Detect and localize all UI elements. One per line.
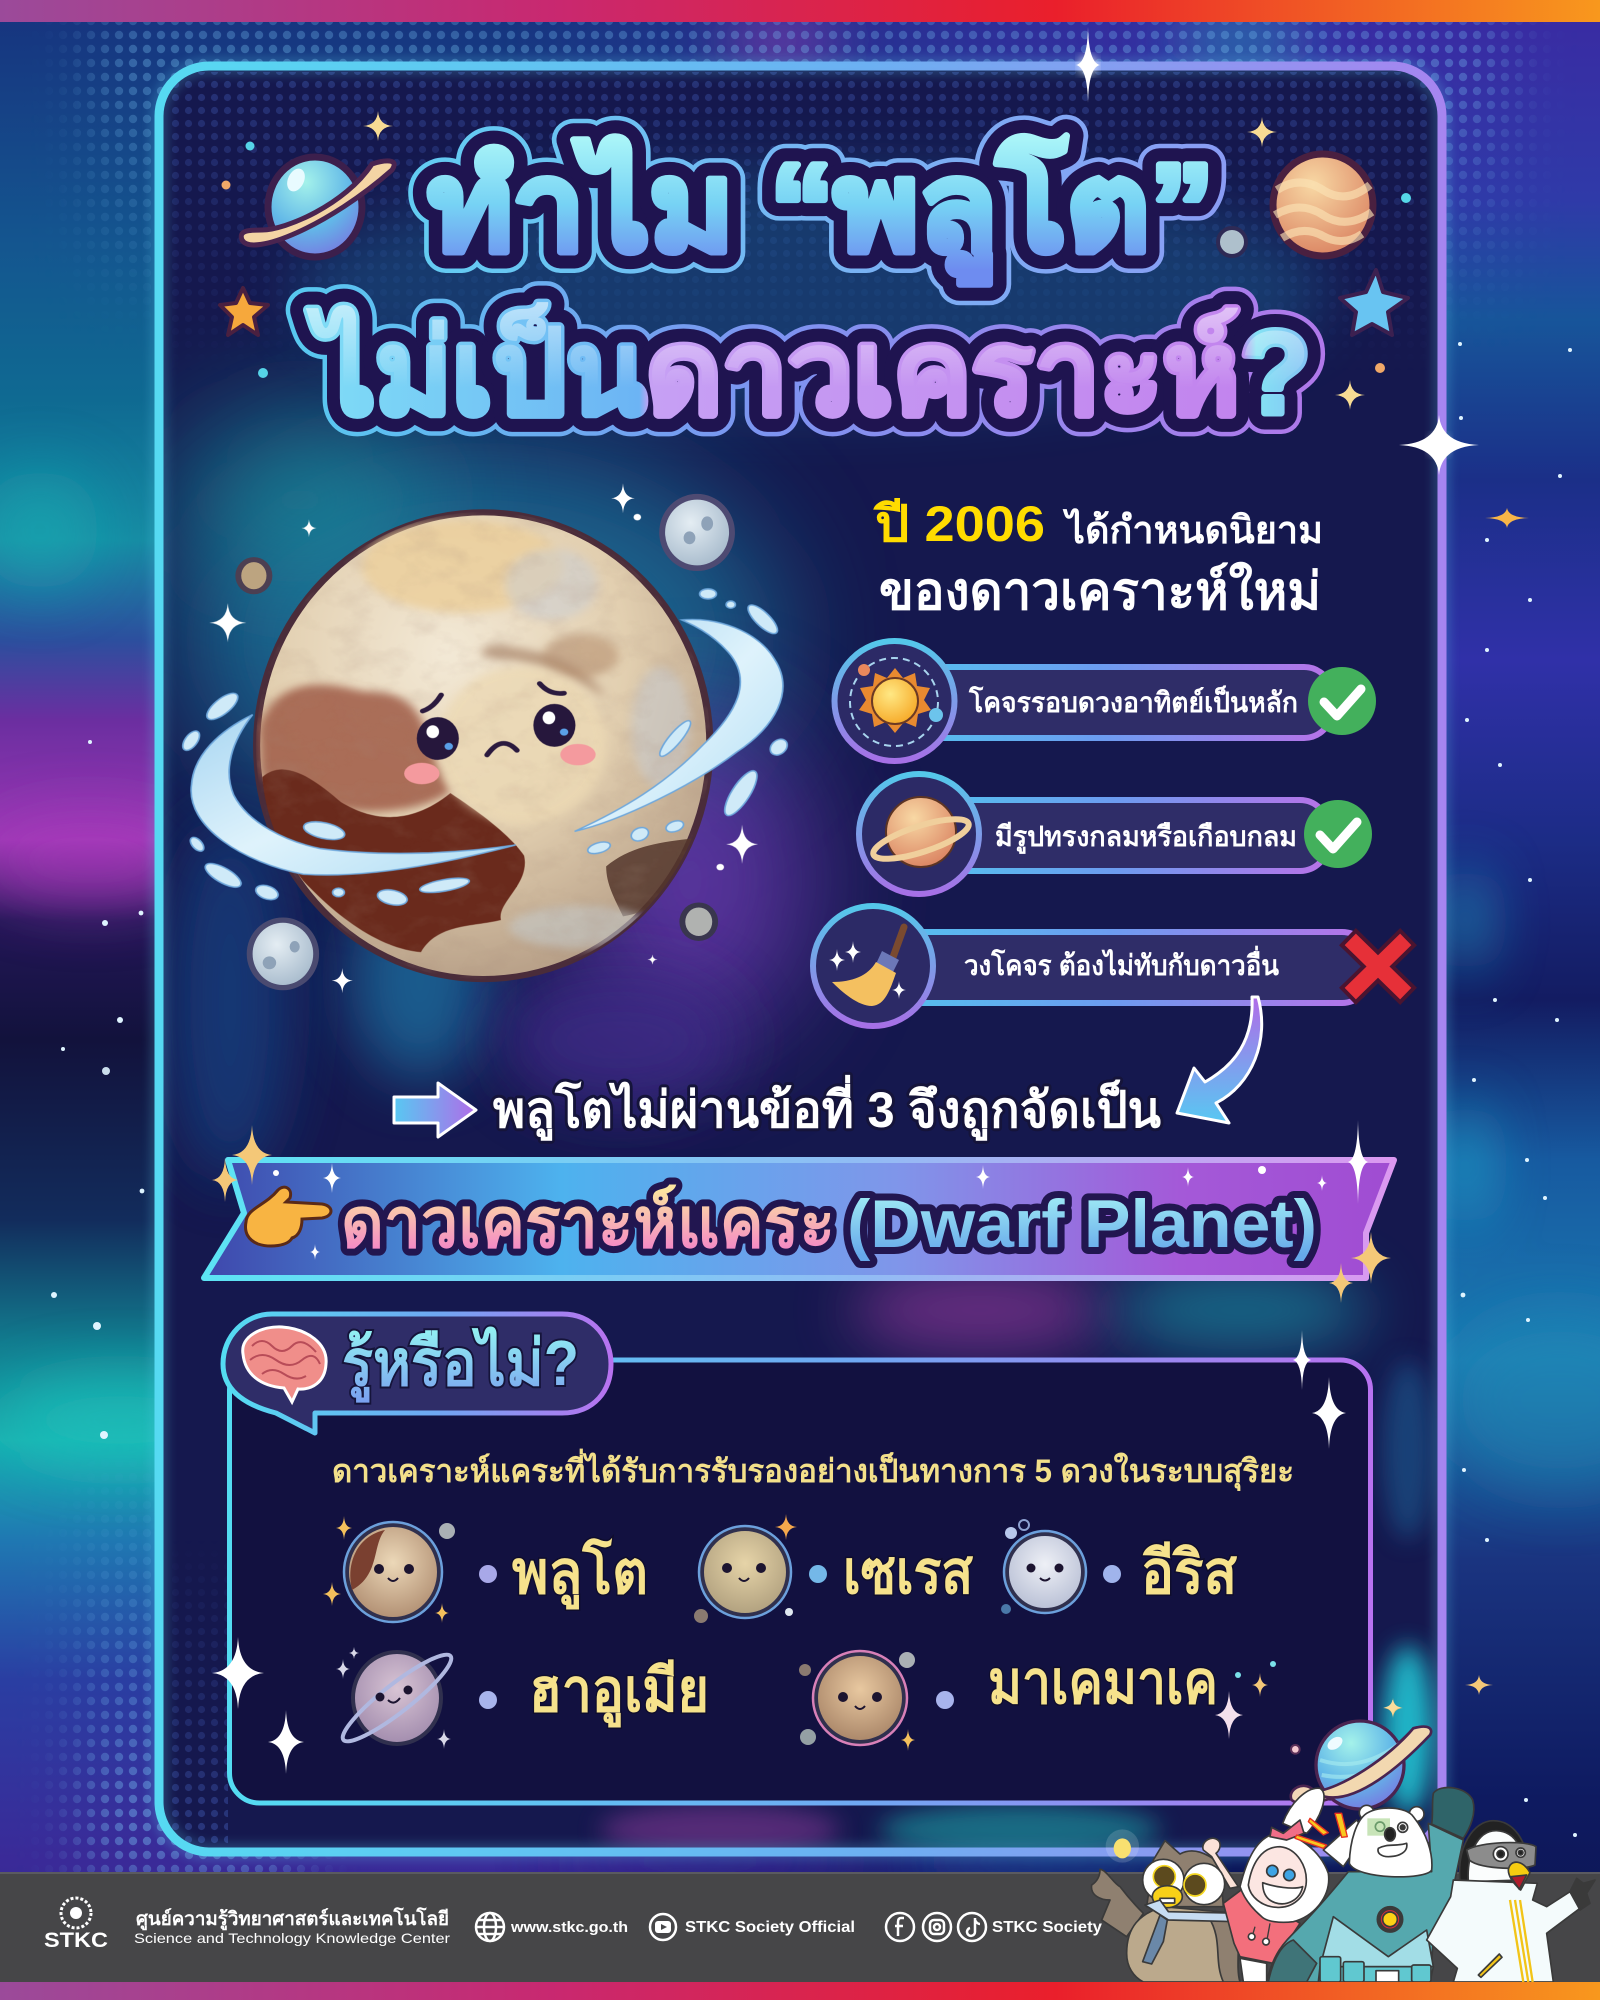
footer band: STKC Society [992,1919,1102,1936]
item: Haumea: ฮาอูเมีย [529,1657,709,1728]
item: Pluto [323,1516,648,1623]
item: Eris: อีริส [1141,1539,1237,1606]
icy ring [179,589,791,908]
text: dwarf planet: ดาวเคราะห์แคระ [341,1184,835,1262]
footer band: Science and Technology Knowledge Center [134,1930,450,1946]
heading: 2006 new planet definition: ได้กำหนดนิยาม [1062,508,1323,552]
title: why Pluto is not a planet [290,136,1330,439]
item: Pluto: พลูโต [512,1537,648,1610]
sparkles on the frame [1076,27,1529,528]
background stars [51,342,1577,1837]
logo: STKC [44,1898,108,1952]
panel sparkles [212,1330,1493,1774]
item: Makemake: มาเคมาเค [988,1649,1218,1716]
title: why Pluto is not a planet: ไม่เป็นดาวเคราะห์? [305,301,1311,439]
speech bubble heading [223,1314,611,1433]
icons: social [886,1913,986,1941]
criterion 2: round shape: มีรูปทรงกลมหรือเกือบกลม [995,821,1297,854]
icon: broom [813,906,933,1026]
sparkles [209,483,758,993]
face [404,684,596,784]
text: dwarf planet: ดาวเคราะห์แคระ [341,1184,835,1262]
title: why Pluto is not a planet: ไม่เป็นดาวเคราะห์? [305,301,1311,439]
mascot: penguin [1427,1821,1595,1982]
icon: sun orbit [834,641,954,761]
bottom gradient bar [0,1982,1600,2000]
heading: 2006 new planet definition: ปี 2006 [873,496,1045,552]
text: five official dwarf planets: ดาวเคราะห์แคระที่ได้รับการรับรองอย่างเป็นทางการ 5 ดวงในระบบสุริยะ [332,1448,1294,1492]
text: dwarf planet: (Dwarf Planet) [847,1186,1317,1262]
mascot: owl [1091,1838,1242,1982]
item: Haumea [335,1645,709,1751]
icon: pointing hand [246,1187,331,1246]
mascot: rabbit-hood girl [1223,1788,1367,1982]
icon: youtube [650,1914,676,1940]
top gradient bar [0,0,1600,22]
title: why Pluto is not a planet: ไม่เป็นดาวเคราะห์? [305,301,1311,439]
icon: title decorations [220,111,1411,410]
icon: red cross [1356,945,1400,988]
footer band [0,1872,1600,1982]
heading: 2006 new planet definition [873,496,1323,621]
icon: mascots and ringed planet [1091,1698,1595,1982]
icon: brain [243,1327,326,1402]
frame: glowing main panel [150,60,1450,1860]
item: Eris [1001,1520,1237,1614]
criterion 1: orbits the sun: โคจรรอบดวงอาทิตย์เป็นหลัก [968,685,1298,718]
icon: sad Pluto with shattered icy ring [179,483,791,993]
icon: ringed planet [859,774,979,894]
text: Pluto failed criterion 3: พลูโตไม่ผ่านข้อที่ 3 จึงถูกจัดเป็น [493,1075,1161,1141]
banner: dwarf planet ribbon [204,1120,1394,1303]
icon: blue ringed planet [241,157,394,257]
criterion 3: clears its orbit: วงโคจร ต้องไม่ทับกับดาวอื่น [964,945,1279,981]
footer band: STKC Society Official [685,1919,855,1936]
title: why Pluto is not a planet: ทำไม “พลูโต” [428,136,1214,284]
title: why Pluto is not a planet: ทำไม “พลูโต” [428,136,1214,284]
logo: STKC: STKC [44,1929,108,1952]
text: dwarf planet: (Dwarf Planet) [847,1186,1317,1262]
moons around Pluto [235,494,735,990]
text: dwarf planet [341,1184,1317,1262]
criterion 1: orbits the sun [834,641,1376,761]
footer band: ศูนย์ความรู้วิทยาศาสตร์และเทคโนโลยี [136,1907,449,1931]
icon: globe [476,1913,504,1941]
icon: orange banded planet [1273,154,1373,256]
item: Ceres [694,1514,973,1623]
arrow: right-pointing [394,1083,476,1137]
title: why Pluto is not a planet: ทำไม “พลูโต” [428,136,1214,284]
criterion 3: clears its orbit [813,906,1400,1026]
glowing bulb [1106,1829,1139,1863]
title: why Pluto is not a planet: ไม่เป็นดาวเคราะห์? [305,301,1311,439]
icon: check [1304,800,1372,868]
speech bubble heading: รู้หรือไม่? [342,1326,579,1403]
icon: blue ringed planet behind mascots [1291,1698,1431,1809]
heading: 2006 new planet definition: ของดาวเคราะห์ใหม่ [879,561,1321,621]
arrow: curved from criterion 3 [1177,997,1262,1123]
icon: check [1308,667,1376,735]
footer band: www.stkc.go.th [510,1919,628,1936]
panel: did you know [212,1314,1493,1803]
banner sparkles [212,1120,1391,1303]
criterion 2: round shape [859,774,1372,894]
item: Ceres: เซเรส [843,1539,973,1606]
mascot: polar bear [1267,1788,1474,1982]
item: Makemake [799,1649,1218,1751]
